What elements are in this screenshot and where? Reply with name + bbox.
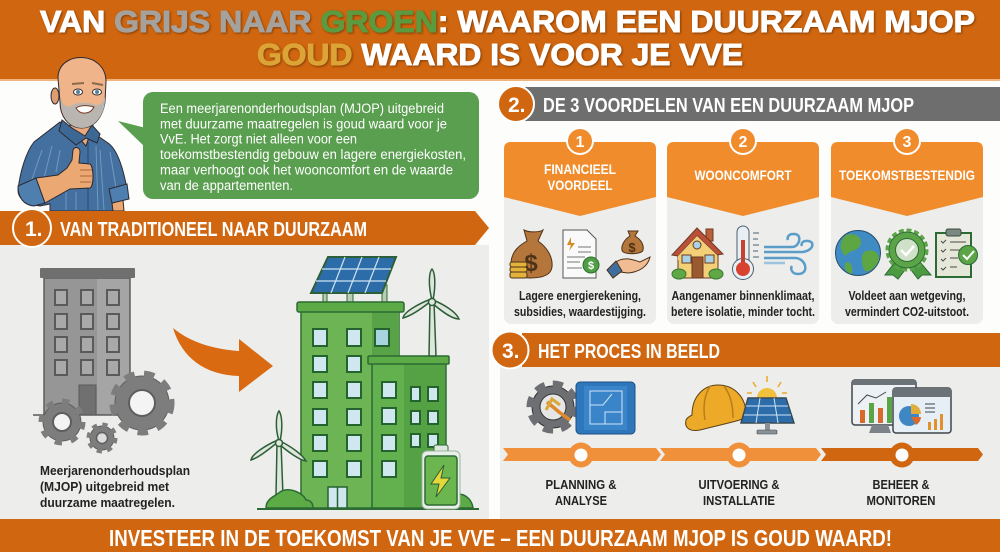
battery icon (422, 445, 460, 509)
header band (0, 0, 1000, 81)
step labels: UITVOERING & (698, 477, 780, 492)
title: VAN GRIJS NAAR GROEN: WAAROM EEN DUURZAAM MJOP (40, 4, 975, 39)
grey traditional building (33, 268, 135, 415)
card 2: wooncomfort: Aangenamer binnenklimaat, (672, 289, 814, 303)
icon: energy bill (563, 230, 599, 278)
icon: award badge (885, 230, 931, 279)
section 1 banner: VAN TRADITIONEEL NAAR DUURZAAM (60, 219, 367, 241)
card 3: toekomstbestendig (831, 128, 983, 324)
icon: globe (836, 230, 880, 276)
title: GOUD WAARD IS VOOR JE VVE (257, 37, 743, 72)
character: smiling man with thumb up (18, 57, 129, 211)
icon: clipboard checklist (936, 229, 978, 277)
icon: hand with money bag: $ (628, 240, 636, 255)
card 1: financieel voordeel: 1 (576, 134, 585, 151)
gears (42, 375, 170, 451)
card 2: wooncomfort: 2 (739, 134, 748, 151)
step labels (546, 477, 936, 508)
intro text (160, 101, 466, 193)
section 1 banner (0, 209, 489, 247)
green sustainable building (297, 257, 449, 508)
grey building caption: Meerjarenonderhoudsplan (40, 463, 190, 478)
section 3 banner: 3. (502, 340, 520, 363)
card 1: financieel voordeel: Lagere energierekening, (519, 289, 641, 303)
card 1: financieel voordeel: FINANCIEEL (544, 162, 616, 177)
solar panel on roof (311, 257, 396, 302)
title (40, 4, 975, 72)
step labels: INSTALLATIE (703, 493, 775, 508)
intro text: van de appartementen. (160, 178, 293, 193)
card 2: wooncomfort (667, 128, 819, 324)
section 3 banner: HET PROCES IN BEELD (538, 341, 720, 363)
bushes and ground (257, 490, 479, 509)
icon: thermometer (732, 226, 759, 280)
icon: wind (764, 234, 812, 274)
grey building caption: duurzame maatregelen. (40, 495, 175, 510)
timeline (503, 442, 983, 468)
card 3: toekomstbestendig: Voldeet aan wetgeving, (848, 289, 966, 303)
section 2 banner: 2. (508, 94, 526, 117)
step labels: PLANNING & (546, 477, 616, 492)
section 2 banner (498, 86, 1000, 122)
icon: hand with money bag (607, 231, 650, 278)
arrow: grey to green (173, 328, 273, 392)
icon: energy bill: $ (588, 260, 594, 272)
icon: monitoring dashboards (852, 380, 951, 433)
card 3: toekomstbestendig: TOEKOMSTBESTENDIG (839, 168, 975, 183)
section 3 banner (492, 332, 1000, 368)
icon: money bag (510, 230, 552, 278)
icon: house (672, 228, 723, 279)
step labels: ANALYSE (555, 493, 607, 508)
speech bubble (118, 92, 479, 199)
grey building caption (40, 463, 190, 510)
icon: money bag: $ (524, 250, 538, 277)
card 3: toekomstbestendig: 3 (903, 134, 912, 151)
section 3 panel background (500, 366, 1000, 519)
left panel background (0, 245, 489, 519)
card 2: wooncomfort: betere isolatie, minder tocht. (671, 305, 815, 319)
intro text: toekomstbestendig gebouw en lagere energiekosten, (160, 147, 466, 162)
icon: helmet and solar panel (686, 376, 794, 434)
card 1: financieel voordeel (504, 128, 656, 324)
section 2 banner: DE 3 VOORDELEN VAN EEN DUURZAAM MJOP (543, 95, 914, 117)
section 1 banner: 1. (25, 218, 43, 241)
wind turbine left (251, 411, 306, 496)
grey building caption: (MJOP) uitgebreid met (40, 479, 170, 494)
step labels: BEHEER & (872, 477, 930, 492)
card 2: wooncomfort: WOONCOMFORT (694, 168, 792, 183)
step labels: MONITOREN (866, 493, 936, 508)
wind turbine right (403, 269, 459, 356)
card 1: financieel voordeel: VOORDEEL (548, 178, 612, 193)
card 3: toekomstbestendig: vermindert CO2-uitstoot. (845, 305, 969, 319)
intro text: Een meerjarenonderhoudsplan (MJOP) uitgebreid (160, 101, 444, 116)
intro text: VvE. Het zorgt niet alleen voor een (160, 132, 357, 146)
intro text: maar verhoogt ook het wooncomfort en de waarde (160, 162, 453, 178)
icon: gear and blueprint (530, 382, 635, 434)
intro text: met duurzame maatregelen is goud waard voor je (160, 116, 447, 132)
card 1: financieel voordeel: subsidies, waardestijging. (514, 305, 646, 319)
